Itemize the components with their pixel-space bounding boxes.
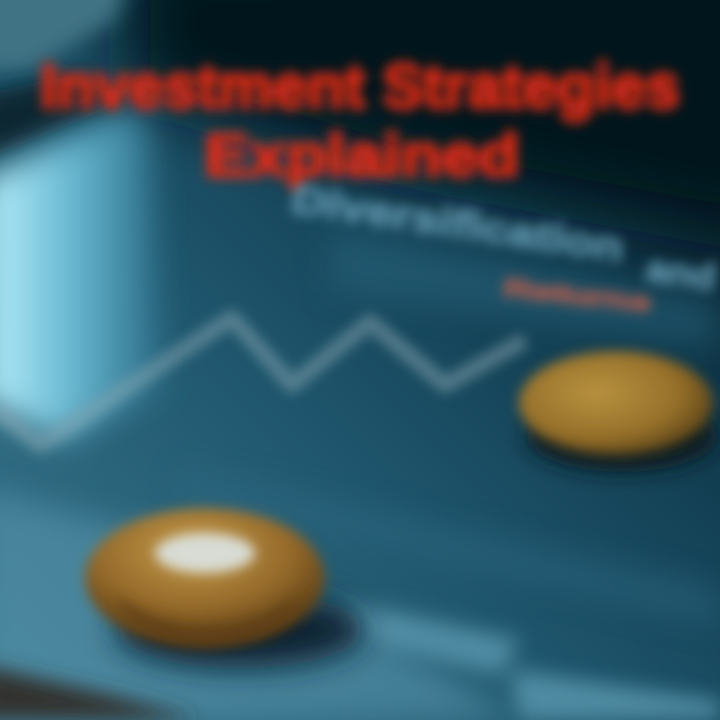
dark corner under patch [0, 75, 130, 160]
icon: right gold coin [519, 351, 718, 472]
bright left panel [0, 108, 160, 440]
title [40, 52, 680, 189]
subtitle [289, 177, 719, 298]
coin shadow [115, 592, 365, 668]
red caption: Returns [502, 274, 652, 317]
coin symbol [155, 533, 255, 573]
coin body [85, 508, 325, 648]
coin lower rim [115, 595, 300, 645]
lower-left lighter board [0, 490, 520, 720]
title: Explained [204, 122, 520, 189]
title: Investment Strategies [40, 52, 680, 122]
dark top band [130, 0, 720, 240]
top-left light patch [0, 0, 135, 70]
coin shadow [526, 400, 718, 472]
bottom-right chart streaks [340, 600, 720, 720]
subtitle: and [644, 247, 719, 298]
bottom-left dark table edge [0, 665, 200, 720]
icon: left gold coin [85, 508, 365, 668]
subtitle: Diversification [289, 177, 626, 270]
line chart [0, 318, 525, 445]
mid-board soft bands [180, 230, 720, 625]
coin body [519, 351, 713, 455]
